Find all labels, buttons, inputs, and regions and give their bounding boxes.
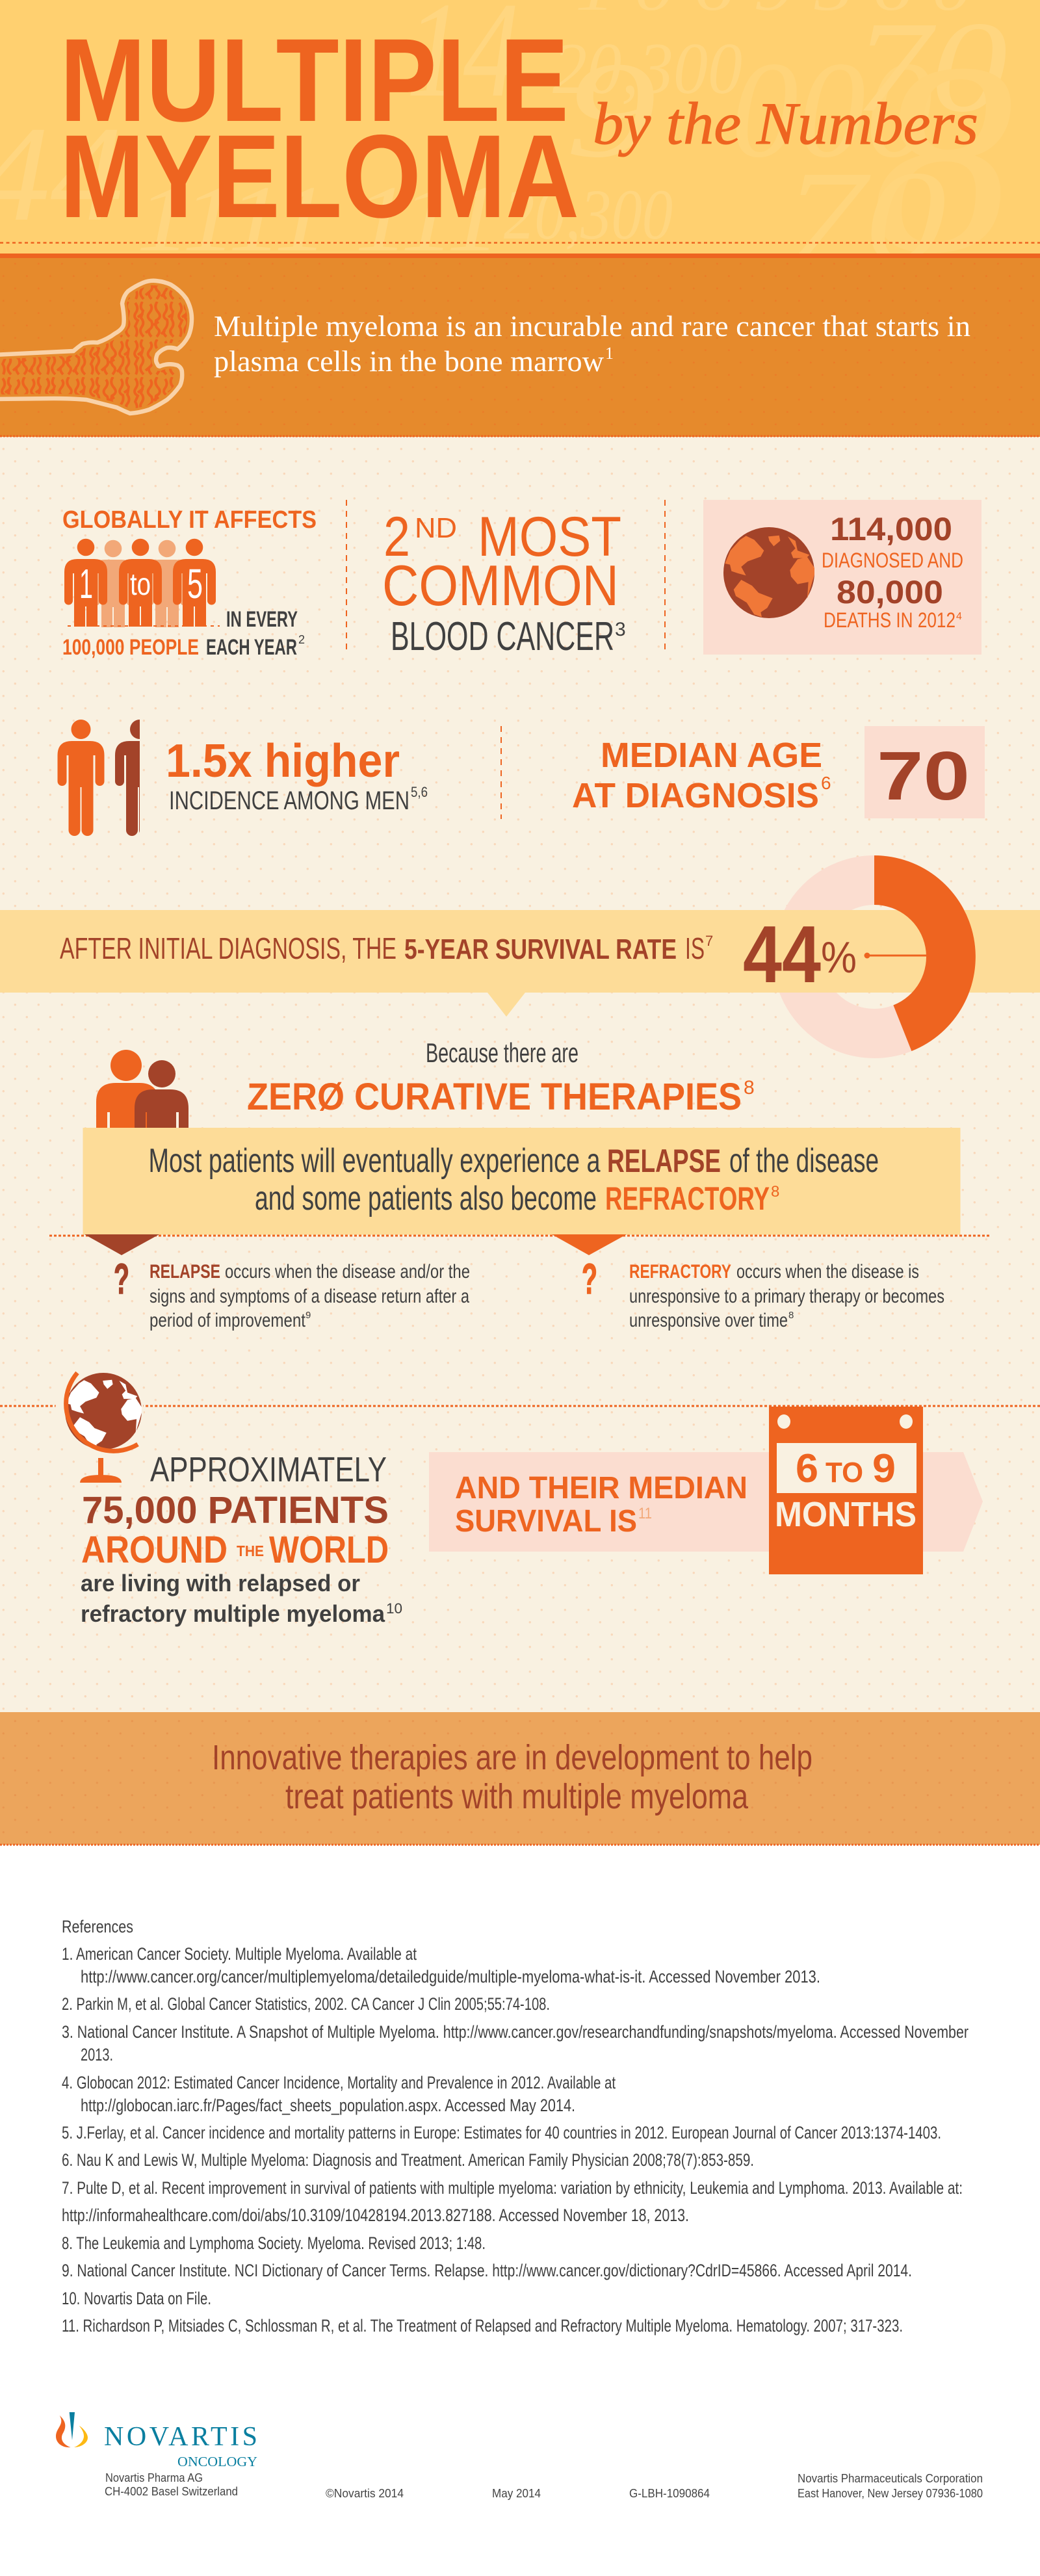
text block: refractory definition: 8: [788, 1310, 794, 1321]
panel: median survival arrow: AND THEIR MEDIAN: [455, 1471, 748, 1505]
logo: Novartis Oncology: [56, 2412, 257, 2469]
panel: second most common: [382, 506, 626, 659]
stats text: 80,000: [837, 574, 943, 610]
footer text: May 2014: [492, 2487, 541, 2500]
panel: median survival arrow: 11: [638, 1505, 652, 1522]
banner: [0, 910, 1040, 1017]
panel: incidence among men: [57, 720, 428, 836]
panel: second most common: 2: [384, 506, 410, 568]
icon: row of five people: [64, 539, 220, 627]
stat text: [62, 607, 305, 660]
arrow: relapse: [84, 1234, 159, 1255]
panel: median survival arrow: SURVIVAL IS: [455, 1504, 637, 1539]
text block: refractory definition: unresponsive to a primary therapy or becomes: [629, 1286, 944, 1307]
survival text: 7: [705, 933, 713, 949]
heading: zero curative therapies: 8: [744, 1077, 755, 1099]
stats text: DIAGNOSED AND: [822, 549, 963, 572]
footer text: CH-4002 Basel Switzerland: [105, 2485, 238, 2498]
panel: diagnosed and deaths: [703, 500, 982, 655]
icon: row of five people: 5: [187, 560, 203, 607]
header background: 20,300: [552, 29, 742, 109]
stat text: INCIDENCE AMONG MEN: [169, 787, 410, 815]
icon: bone with marrow: [0, 281, 192, 413]
footer text: ©Novartis 2014: [326, 2487, 404, 2500]
intro text: Multiple myeloma is an incurable and rare cancer that starts in: [214, 309, 970, 343]
panel: median age: [572, 726, 985, 818]
panel: median age: AT DIAGNOSIS: [572, 776, 819, 815]
stat text: EACH YEAR: [206, 635, 297, 660]
header background: 20,300: [504, 175, 673, 254]
panel: second most common: COMMON: [382, 553, 619, 618]
text block: relapse definition: signs and symptoms of a disease return after a: [150, 1286, 469, 1307]
icon: calendar 6 to 9 months: [769, 1407, 923, 1574]
text block: refractory definition: unresponsive over time: [629, 1310, 788, 1331]
references: 4. Globocan 2012: Estimated Cancer Incidence, Mortality and Prevalence in 2012. Available at: [62, 2073, 616, 2092]
footer text: East Hanover, New Jersey 07936-1080: [798, 2487, 983, 2500]
stats text: DEATHS IN 2012: [824, 608, 956, 632]
text block: refractory definition: REFRACTORY: [629, 1261, 731, 1282]
title: [60, 14, 579, 242]
text: because there are: Because there are: [426, 1037, 578, 1068]
header background: 1111 111: [136, 167, 500, 271]
text block: 75,000 patients: WORLD: [269, 1529, 389, 1571]
references: 10. Novartis Data on File.: [62, 2289, 211, 2308]
stat box: 70: 70: [877, 738, 970, 814]
header background: [0, 0, 1040, 254]
text block: refractory definition: [582, 1255, 944, 1331]
footer text: Novartis Pharmaceuticals Corporation: [798, 2472, 983, 2485]
text block: relapse definition: [114, 1255, 470, 1331]
text block: relapse definition: occurs when the disease and/or the: [225, 1261, 470, 1282]
intro text: plasma cells in the bone marrow: [214, 345, 604, 378]
stat box: 70: [864, 726, 985, 818]
panel: second most common: ND: [415, 512, 457, 544]
text block: 75,000 patients: 75,000 PATIENTS: [82, 1489, 389, 1531]
panel: innovative therapies band: [0, 1712, 1040, 1845]
references: http://www.cancer.org/cancer/multiplemyeloma/detailedguide/multiple-myeloma-what-is-it. Accessed November 2013.: [81, 1967, 820, 1986]
stats text: [822, 511, 963, 632]
footer text: Novartis Pharma AG: [105, 2471, 203, 2484]
logo: Novartis Oncology: ONCOLOGY: [177, 2454, 257, 2469]
icon: desk globe: [55, 1367, 144, 1483]
icon: two people: [96, 1050, 188, 1128]
stat text: 100,000 PEOPLE: [62, 635, 199, 660]
references: 2. Parkin M, et al. Global Cancer Statistics, 2002. CA Cancer J Clin 2005;55:74-108.: [62, 1994, 550, 2014]
text block: relapse definition: RELAPSE: [150, 1261, 220, 1282]
stat text: 2: [298, 633, 305, 646]
icon: two men: [57, 720, 140, 836]
stat text: 5,6: [411, 784, 428, 800]
icon: calendar 6 to 9 months: MONTHS: [775, 1495, 916, 1534]
panel: second most common: MOST: [478, 506, 621, 568]
value: 44 percent: 44: [743, 910, 821, 1000]
icon: row of five people: 1: [79, 560, 93, 607]
text block: 75,000 patients: 10: [386, 1600, 402, 1617]
text block: 75,000 patients: refractory multiple myeloma: [81, 1600, 385, 1627]
logo: Novartis Oncology: NOVARTIS: [104, 2422, 257, 2452]
header background: 000: [731, 33, 933, 186]
panel: relapse and refractory box: [83, 1128, 961, 1235]
title: MYELOMA: [60, 110, 579, 242]
title: MULTIPLE: [60, 14, 569, 146]
text block: relapse definition: ?: [114, 1255, 129, 1303]
panel: second most common: BLOOD CANCER: [391, 614, 614, 659]
text block: 75,000 patients: AROUND: [81, 1529, 228, 1571]
footer text: G-LBH-1090864: [629, 2487, 710, 2500]
panel: second most common: 3: [615, 619, 626, 640]
panel: relapse and refractory box: Most patients will eventually experience a: [148, 1142, 601, 1180]
donut value segment: [874, 855, 976, 1051]
icon: calendar 6 to 9 months: 6: [796, 1446, 818, 1491]
icon: calendar 6 to 9 months: 9: [872, 1446, 896, 1491]
text block: relapse definition: period of improvement: [150, 1310, 306, 1331]
stat text: IN EVERY: [226, 607, 298, 632]
panel: relapse and refractory box: and some patients also become: [255, 1180, 597, 1217]
references: http://informahealthcare.com/doi/abs/10.3109/10428194.2013.827188. Accessed November 18, 2013.: [62, 2205, 689, 2225]
heading: zero curative therapies: ZERØ CURATIVE THERAPIES: [247, 1076, 742, 1118]
references: 2013.: [81, 2045, 113, 2064]
text block: 75,000 patients: are living with relapsed or: [81, 1570, 360, 1596]
survival text: AFTER INITIAL DIAGNOSIS, THE: [60, 931, 396, 965]
references: References: [62, 1917, 133, 1936]
header background: 9: [566, 33, 656, 186]
subtitle: by the Numbers: by the Numbers: [593, 90, 978, 157]
text block: relapse definition: 9: [306, 1310, 311, 1321]
footer text: [105, 2471, 983, 2500]
text block: 75,000 patients: APPROXIMATELY: [150, 1450, 387, 1489]
panel: median age: 6: [821, 773, 831, 793]
text block: refractory definition: ?: [582, 1255, 597, 1303]
panel: median survival arrow: [429, 1407, 983, 1574]
panel: cream body background: [0, 437, 1040, 1712]
text block: 75,000 patients: THE: [237, 1542, 264, 1559]
panel: relapse and refractory box: REFRACTORY: [605, 1180, 770, 1217]
panel: intro band: [0, 258, 1040, 437]
references: 8. The Leukemia and Lymphoma Society. Myeloma. Revised 2013; 1:48.: [62, 2233, 486, 2253]
survival text: 5-YEAR SURVIVAL RATE: [404, 933, 677, 965]
references: 6. Nau K and Lewis W, Multiple Myeloma: Diagnosis and Treatment. American Family Physician 2008;78(7):853-859.: [62, 2150, 754, 2170]
panel: relapse and refractory box: RELAPSE: [607, 1143, 721, 1179]
icon: calendar 6 to 9 months: TO: [826, 1457, 863, 1489]
intro text: [214, 309, 970, 378]
icon: globe: [723, 527, 814, 618]
stat text: [166, 735, 428, 815]
stats text: 114,000: [830, 511, 952, 547]
panel: median age: MEDIAN AGE: [601, 736, 822, 775]
value: 44 percent: %: [821, 933, 857, 982]
stat text: 1.5x higher: [166, 735, 400, 787]
chart: survival donut and band: [0, 855, 1040, 1051]
panel: zero curative therapies: [96, 1037, 755, 1128]
panel: globally it affects: [62, 506, 317, 660]
arrow: refractory: [552, 1234, 627, 1255]
icon: row of five people: to: [130, 567, 151, 602]
panel: innovative therapies band: treat patients with multiple myeloma: [285, 1777, 749, 1816]
stats text: 4: [956, 611, 962, 622]
pointer: [864, 953, 926, 958]
header background: 8: [871, 7, 1014, 309]
survival text: [60, 931, 713, 965]
text block: refractory definition: occurs when the disease is: [736, 1261, 919, 1282]
panel: innovative therapies band: Innovative therapies are in development to help: [212, 1738, 812, 1777]
references: [62, 1917, 968, 2335]
text block: 75,000 patients: [81, 1450, 402, 1627]
heading: GLOBALLY IT AFFECTS: [62, 506, 317, 534]
references: 1. American Cancer Society. Multiple Myeloma. Available at: [62, 1944, 417, 1964]
header background: 70: [784, 145, 946, 289]
intro text: 1: [605, 344, 614, 363]
survival text: IS: [685, 931, 705, 965]
references: http://globocan.iarc.fr/Pages/fact_sheets_population.aspx. Accessed May 2014.: [81, 2096, 575, 2115]
panel: relapse and refractory box: 8: [771, 1183, 779, 1201]
panel: relapse and refractory box: of the disease: [729, 1142, 879, 1180]
